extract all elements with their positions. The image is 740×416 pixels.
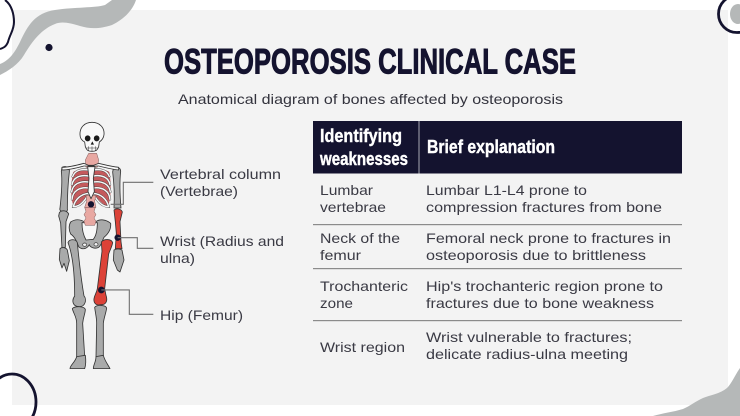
row: lumbar vertebrae: compression fractures from bone bbox=[426, 199, 662, 215]
right shin bbox=[95, 305, 107, 357]
row: trochanteric zone: zone bbox=[320, 295, 353, 311]
ribcage bbox=[71, 168, 111, 207]
left arm bbox=[59, 167, 69, 271]
left shin bbox=[72, 307, 85, 357]
right foot bbox=[93, 355, 110, 369]
row: lumbar vertebrae: vertebrae bbox=[320, 199, 386, 215]
marker: hip bbox=[98, 287, 105, 293]
skull bbox=[80, 122, 104, 151]
decoration: bottom-right blob bbox=[653, 368, 740, 416]
table header bbox=[313, 121, 682, 174]
row: neck of the femur bbox=[320, 230, 671, 263]
rib interior bbox=[71, 168, 111, 207]
label: vertebral column bbox=[160, 166, 281, 199]
row: trochanteric zone: Trochanteric bbox=[320, 278, 408, 294]
decoration: bottom-left ring bbox=[0, 374, 36, 416]
leader line: hip bbox=[101, 290, 153, 314]
table header: weaknesses bbox=[319, 149, 408, 169]
left femur bbox=[68, 240, 85, 307]
row: trochanteric zone: fractures due to bone weakness bbox=[426, 295, 654, 311]
clavicles bbox=[62, 163, 119, 170]
label: vertebral column: Vertebral column bbox=[160, 166, 281, 182]
label: wrist: ulna) bbox=[160, 250, 195, 266]
pelvis openings bbox=[83, 243, 98, 246]
decoration: top-right ring bbox=[718, 0, 740, 32]
label: vertebral column: (Vertebrae) bbox=[160, 183, 238, 199]
decoration: top-left curve bbox=[0, 0, 14, 49]
neck vertebrae bbox=[85, 153, 99, 167]
row: lumbar vertebrae: Lumbar bbox=[320, 182, 373, 198]
leader line: wrist bbox=[118, 238, 153, 248]
row: neck of the femur: osteoporosis due to brittleness bbox=[426, 247, 646, 263]
decoration: top-left blob bbox=[0, 0, 136, 75]
left ribs bbox=[72, 170, 89, 207]
row: neck of the femur: femur bbox=[320, 247, 361, 263]
marker: wrist bbox=[114, 234, 121, 241]
row: neck of the femur: Neck of the bbox=[320, 230, 400, 246]
row: wrist region: delicate radius-ulna meeting bbox=[426, 346, 628, 362]
subtitle: Anatomical diagram of bones affected by osteoporosis bbox=[178, 91, 563, 107]
row: wrist region: Wrist vulnerable to fractures; bbox=[426, 329, 632, 345]
right ribs bbox=[93, 170, 110, 207]
sternum bbox=[88, 167, 95, 199]
row: lumbar vertebrae bbox=[320, 182, 662, 215]
skeleton diagram bbox=[59, 122, 153, 369]
row: trochanteric zone: Hip's trochanteric region prone to bbox=[426, 278, 663, 294]
decoration: dot bbox=[45, 44, 53, 51]
lumbar spine bbox=[84, 207, 96, 225]
row: wrist region bbox=[320, 329, 632, 362]
label: wrist: Wrist (Radius and bbox=[160, 233, 284, 249]
table bbox=[313, 121, 682, 362]
marker: vertebra bbox=[88, 201, 94, 207]
row: wrist region: Wrist region bbox=[320, 339, 405, 355]
row: lumbar vertebrae: Lumbar L1-L4 prone to bbox=[426, 182, 587, 198]
leader line: vertebral column bbox=[111, 182, 153, 204]
table header: Identifying bbox=[320, 126, 402, 146]
label: hip: Hip (Femur) bbox=[160, 307, 243, 323]
lumbar upper spine bbox=[85, 195, 96, 207]
right femur highlighted bbox=[94, 240, 113, 305]
sacrum bbox=[82, 223, 97, 240]
table header: Brief explanation bbox=[427, 137, 555, 157]
row: neck of the femur: Femoral neck prone to fractures in bbox=[426, 230, 671, 246]
row: trochanteric zone bbox=[320, 278, 663, 311]
right hand bbox=[113, 249, 124, 272]
title: OSTEOPOROSIS CLINICAL CASE bbox=[164, 42, 576, 82]
right forearm highlighted bbox=[114, 209, 122, 249]
right arm upper bbox=[113, 167, 121, 208]
label: wrist bbox=[160, 233, 284, 266]
left foot bbox=[70, 355, 86, 369]
pelvis bbox=[69, 220, 111, 249]
